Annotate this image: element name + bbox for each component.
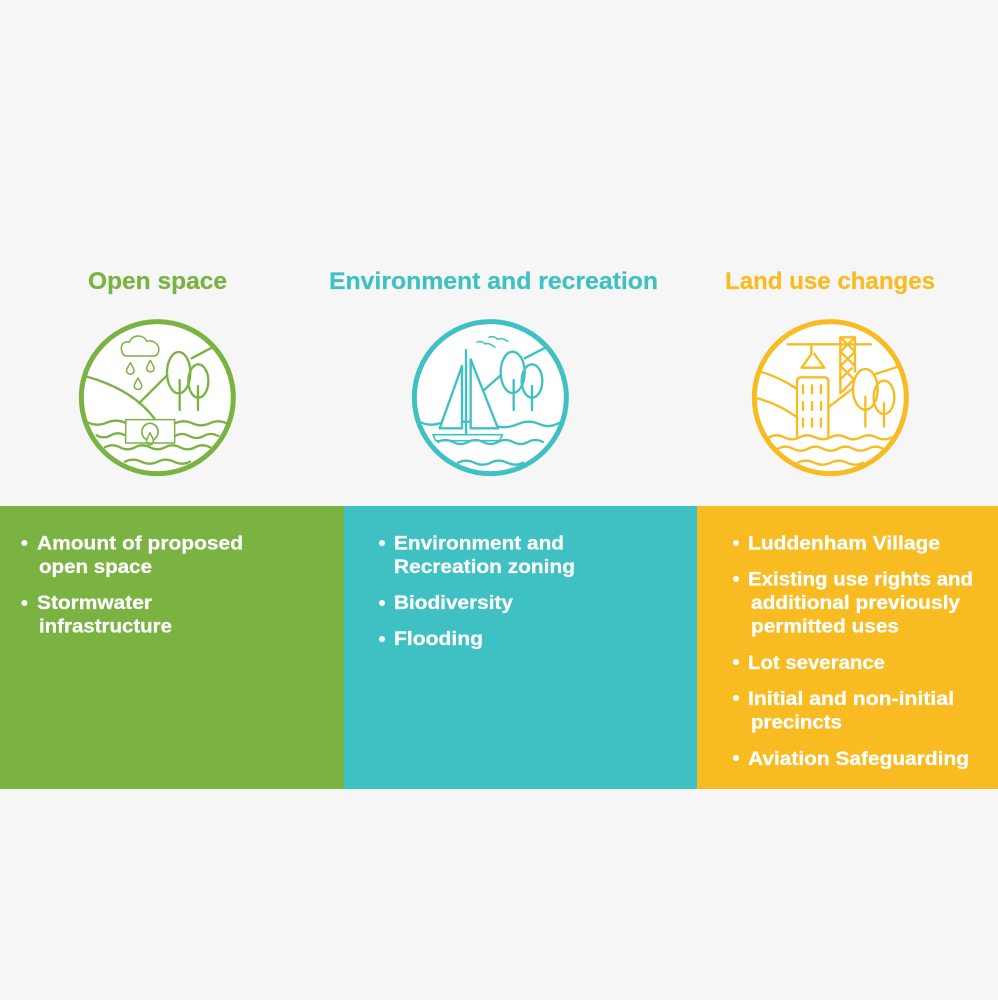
heading: Environment and recreation: Environment and recreation [329, 268, 658, 295]
bullet: Amount of proposed open space [21, 534, 243, 578]
bullet: Stormwater infrastructure [21, 593, 172, 638]
bullet: Biodiversity: Biodiversity [394, 593, 513, 614]
icon: urban development landscape [754, 322, 906, 474]
panel: land use changes [697, 506, 998, 789]
bullet: Stormwater infrastructure: Stormwater [37, 593, 153, 614]
bullet: Environment and Recreation zoning: Recreation zoning [394, 557, 575, 578]
heading: Land use changes: Land use changes [725, 268, 935, 295]
icon: open space landscape [81, 322, 233, 474]
bullet: Existing use rights: Existing use rights and [748, 570, 973, 590]
heading: Open space: Open space [88, 268, 227, 295]
bullet: Environment and Recreation zoning [379, 534, 575, 578]
bullet: Stormwater infrastructure: infrastructure [39, 616, 172, 638]
bullet: Initial and non-initial precincts: Initial and non-initial [748, 689, 954, 710]
bullet: Existing use rights [733, 570, 973, 638]
bullet: Lot severance: Lot severance [748, 653, 885, 674]
bullet: Aviation Safeguarding: Aviation Safeguarding [748, 749, 969, 770]
bullet: Luddenham Village: Luddenham Village [748, 534, 940, 554]
bullet: Amount of proposed open space: Amount of proposed [37, 534, 243, 554]
bullet: Initial and non-initial precincts [733, 689, 954, 734]
bullet: Initial and non-initial precincts: precincts [751, 712, 842, 734]
bullet: Amount of proposed open space: open space [39, 557, 152, 578]
bullet: Flooding: Flooding [394, 629, 483, 650]
bullet: Existing use rights: additional previously [751, 593, 960, 614]
icon: sailboat landscape [414, 322, 566, 474]
panel: open space [0, 506, 344, 789]
panel: environment and recreation [344, 506, 697, 789]
bullet: Environment and Recreation zoning: Environment and [394, 534, 564, 554]
bullet: Existing use rights: permitted uses [751, 616, 899, 638]
